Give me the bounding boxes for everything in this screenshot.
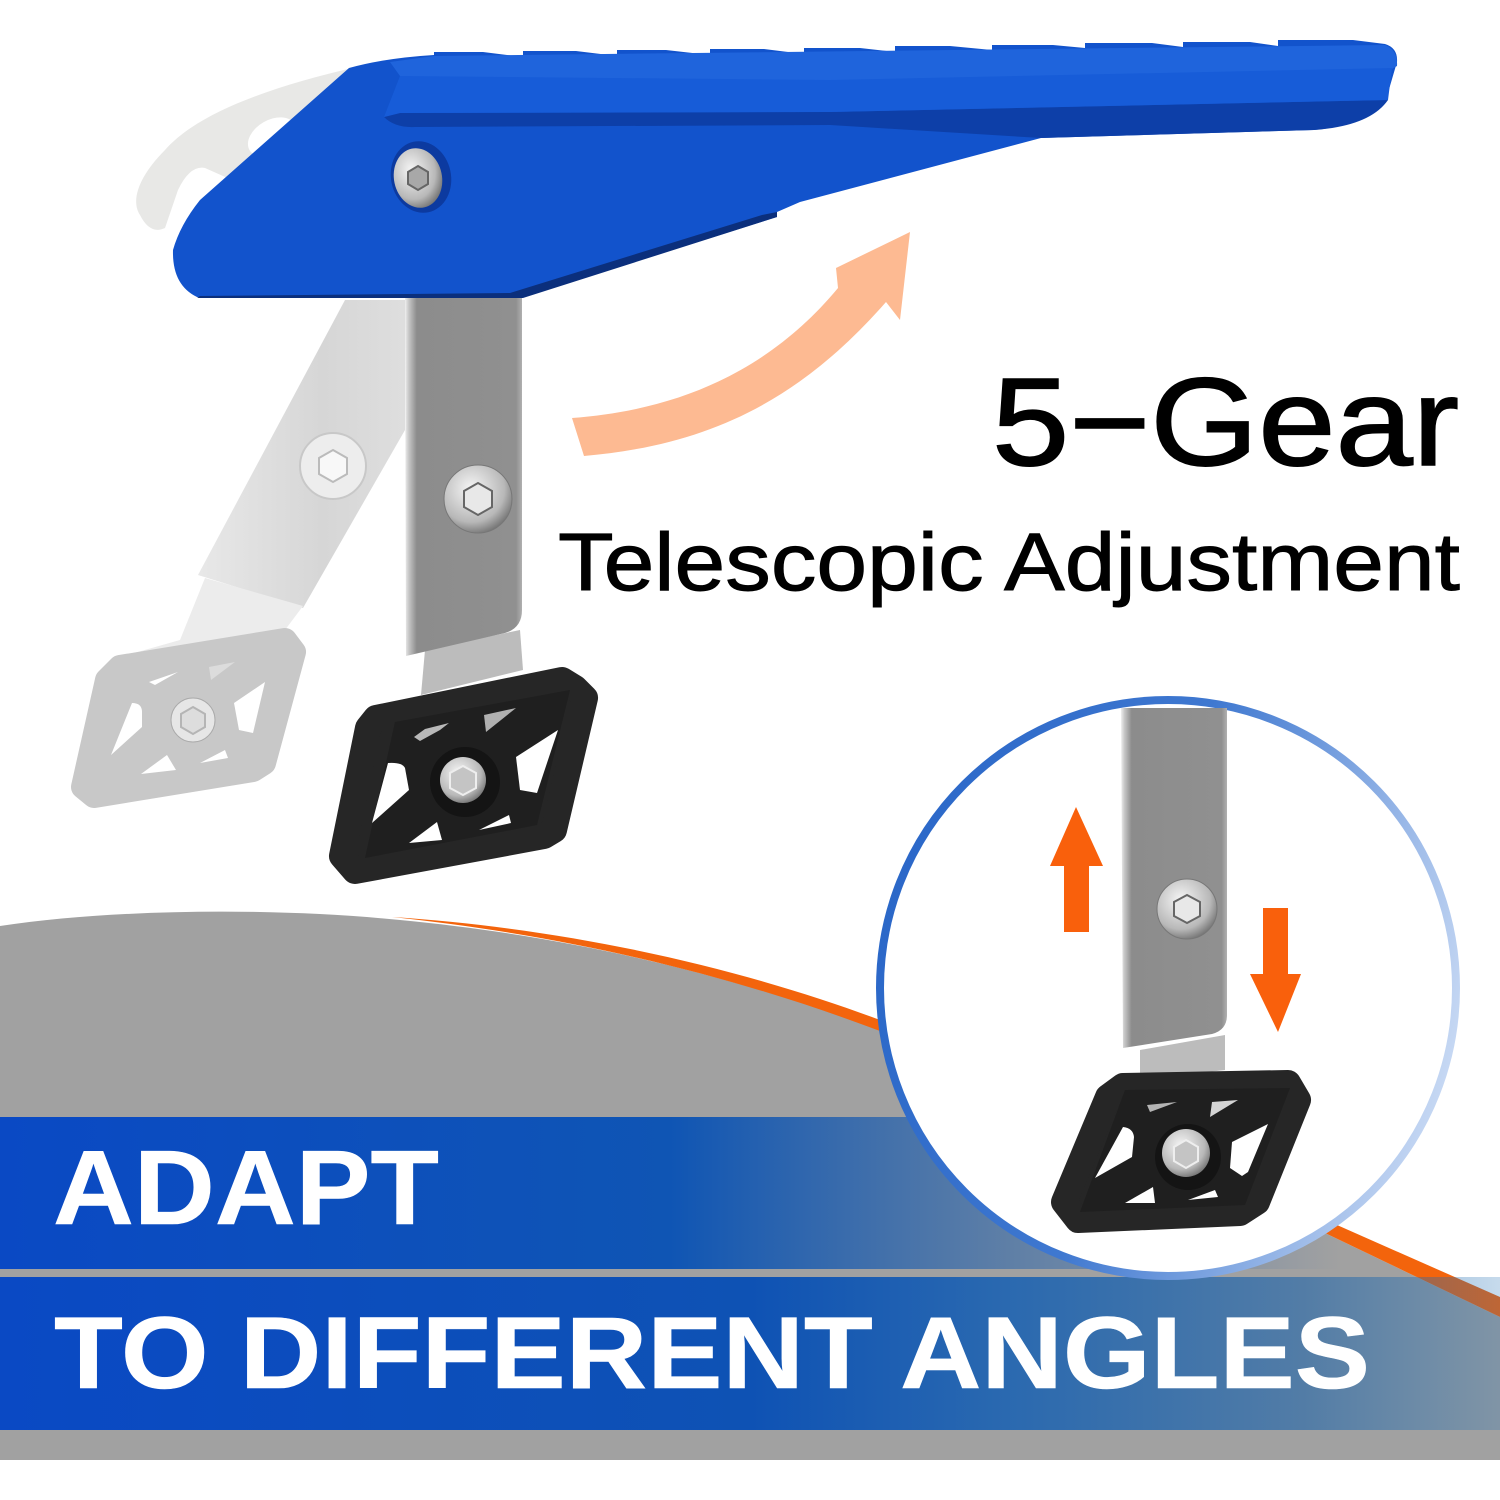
peach curved arrow [572,232,910,456]
orange up arrow [1050,807,1103,932]
text: TO DIFFERENT ANGLES: TO DIFFERENT ANGLES [54,1296,1370,1410]
faded hook behind handle [136,68,352,230]
blue band: to different angles [0,1277,1500,1430]
detail bolt [1157,879,1217,939]
blue handle [173,40,1397,298]
detail circle [880,700,1456,1276]
black rubber foot pad [342,680,585,871]
gray background swoosh [0,912,1500,1460]
orange down arrow [1250,908,1301,1032]
blue band: ADAPT [0,1117,1340,1269]
detail foot pad [1064,1083,1298,1220]
faded foot pad [83,640,294,796]
subheading: Telescopic Adjustment: Telescopic Adjustment [558,517,1460,608]
heading: 5-Gear: 5−Gear [992,353,1459,492]
text: ADAPT: ADAPT [53,1129,439,1247]
steel telescopic arm [405,298,523,695]
faded telescopic arm, tilted position [83,300,405,796]
bolt on arm [444,465,512,533]
orange swoosh line [392,917,1500,1317]
bolt on handle [384,136,458,218]
detail steel arm [1140,1035,1225,1080]
